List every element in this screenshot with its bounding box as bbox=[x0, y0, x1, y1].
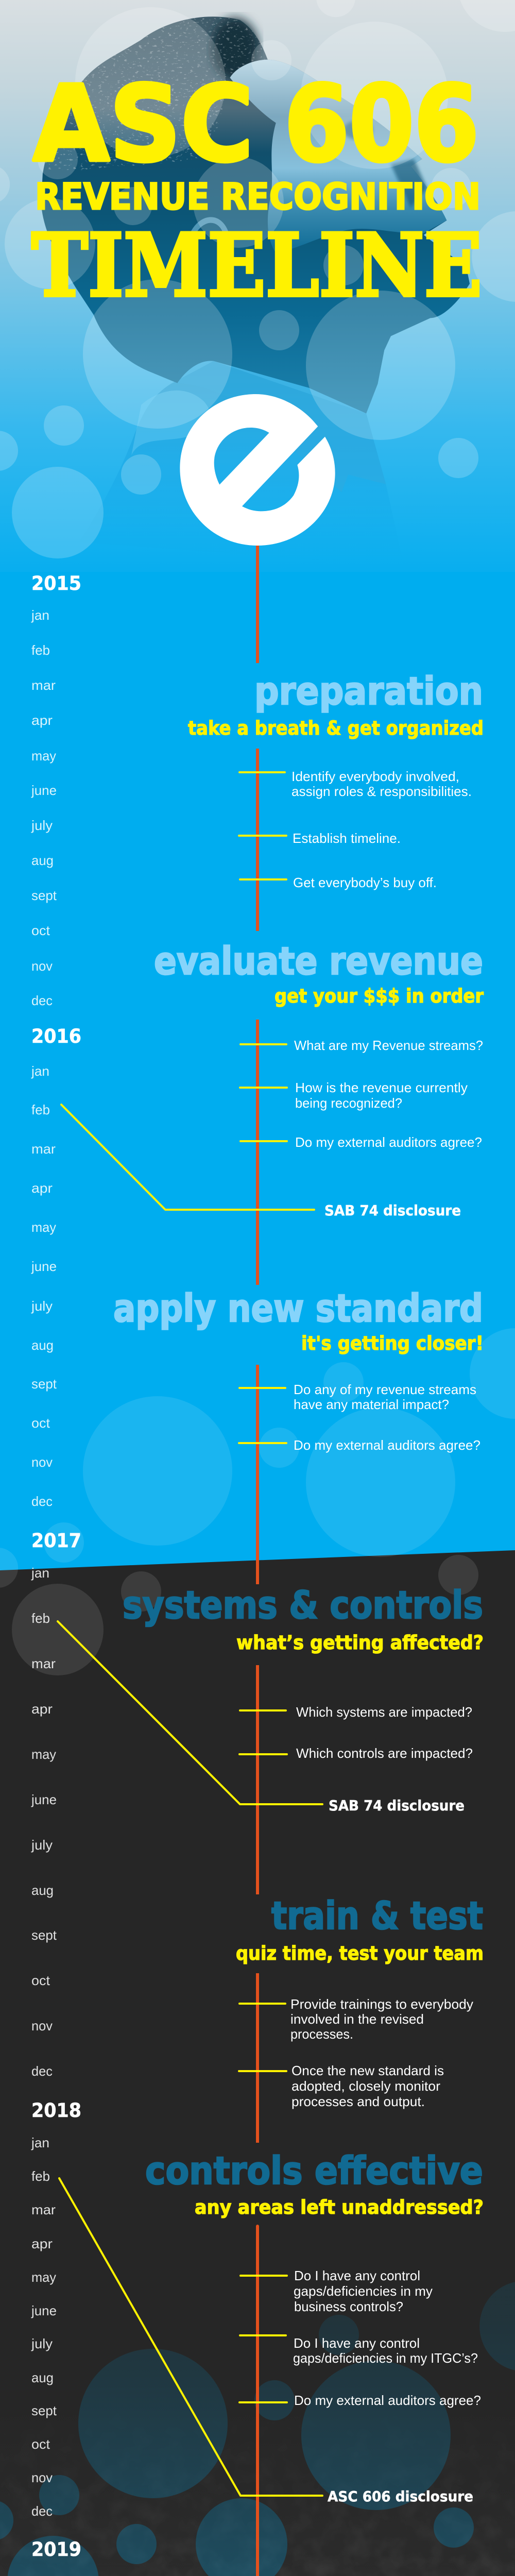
header bubbles bbox=[0, 0, 515, 558]
timeline segment bbox=[256, 749, 259, 931]
months: 2017: sept bbox=[31, 1927, 57, 1943]
months: 2018: 2018 bbox=[31, 2099, 81, 2122]
item: provide trainings: processes. bbox=[290, 2026, 353, 2042]
months: 2018: sept bbox=[31, 2403, 57, 2418]
face bbox=[230, 60, 447, 253]
callout: SAB 74 disclosure 2016 bbox=[61, 1105, 461, 1219]
months: 2018: may bbox=[31, 2269, 56, 2285]
item: revenue streams: What are my Revenue streams? bbox=[294, 1038, 483, 1053]
months: 2018: apr bbox=[31, 2236, 53, 2251]
item: identify everybody: Identify everybody involved, bbox=[291, 769, 459, 784]
item: revenue recognized bbox=[240, 1080, 468, 1111]
title: 606 bbox=[284, 63, 479, 185]
subheading: getting closer: it's getting closer! bbox=[301, 1332, 484, 1354]
item: buy off: Get everybody’s buy off. bbox=[293, 875, 437, 890]
middle bubbles bbox=[0, 1328, 515, 1675]
months: 2017: mar bbox=[31, 1656, 56, 1671]
item: material impact: Do any of my revenue streams bbox=[294, 1382, 476, 1397]
months: 2016: mar bbox=[31, 1141, 56, 1157]
item: business controls: business controls? bbox=[294, 2299, 403, 2314]
item: provide trainings bbox=[239, 1996, 473, 2042]
collar bbox=[174, 361, 386, 492]
months: 2015: june bbox=[31, 783, 57, 798]
subheading: areas unaddressed: any areas left unaddressed? bbox=[195, 2196, 484, 2218]
title: ASC bbox=[33, 63, 253, 185]
header sky background bbox=[0, 0, 515, 572]
months: 2018: july bbox=[31, 2336, 53, 2351]
item: auditors agree: Do my external auditors agree? bbox=[295, 1134, 482, 1150]
left collar highlight bbox=[131, 391, 211, 455]
months: 2017: oct bbox=[31, 1973, 50, 1988]
months: 2016: aug bbox=[31, 1337, 54, 1353]
months: 2015: mar bbox=[31, 677, 56, 693]
subheading: what is affected: what’s getting affected? bbox=[236, 1632, 484, 1654]
months: 2017: july bbox=[31, 1837, 53, 1853]
timeline segment bbox=[256, 1665, 259, 1894]
dark back of hair bbox=[211, 18, 259, 79]
main blue background bbox=[0, 572, 515, 1602]
months: 2018: aug bbox=[31, 2370, 54, 2385]
item: controls impacted: Which controls are impacted? bbox=[296, 1745, 473, 1761]
timeline segment bbox=[256, 1973, 259, 2143]
subheading: take a breath: take a breath & get organized bbox=[188, 717, 484, 739]
months: 2018 bbox=[31, 2099, 81, 2519]
months: 2015: nov bbox=[31, 958, 53, 974]
head silhouette bbox=[41, 16, 470, 414]
months: 2016: dec bbox=[31, 1494, 53, 1509]
months: 2015: apr bbox=[31, 713, 53, 728]
panel: preparation bbox=[188, 669, 484, 931]
months: 2018: oct bbox=[31, 2436, 50, 2452]
panel: evaluate revenue bbox=[61, 939, 484, 1285]
timeline segment: intro bbox=[256, 546, 259, 663]
months: 2018: nov bbox=[31, 2470, 53, 2485]
item: business controls bbox=[241, 2268, 433, 2314]
icon: embark logo mark bbox=[180, 394, 335, 546]
callout: SAB 74 disclosure 2017: SAB 74 disclosure bbox=[329, 1797, 465, 1814]
months: 2017: may bbox=[31, 1747, 56, 1762]
months: 2018: jan bbox=[31, 2135, 49, 2150]
months: 2016: nov bbox=[31, 1454, 53, 1470]
item: establish timeline: Establish timeline. bbox=[293, 831, 401, 846]
months: 2018: dec bbox=[31, 2503, 53, 2519]
months: 2017: jan bbox=[31, 1565, 49, 1581]
item: material impact: have any material impact? bbox=[294, 1397, 449, 1412]
months: 2016: 2016 bbox=[31, 1025, 81, 1047]
months: 2017: apr bbox=[31, 1701, 53, 1717]
subheading: get your money in order: get your $$$ in order bbox=[274, 985, 484, 1007]
item: systems impacted: Which systems are impacted? bbox=[296, 1704, 472, 1720]
item: auditors agree: Do my external auditors agree? bbox=[294, 1437, 480, 1453]
item: business controls: gaps/deficiencies in my bbox=[294, 2283, 433, 2299]
heading: controls effective: controls effective bbox=[145, 2149, 483, 2193]
timeline segment bbox=[256, 1365, 259, 1584]
panel: controls effective bbox=[59, 2149, 484, 2576]
months: 2017: feb bbox=[31, 1611, 50, 1626]
header photo: man looking up bbox=[42, 12, 470, 492]
title: REVENUE RECOGNITION bbox=[35, 176, 480, 218]
panel: apply new standard bbox=[113, 1286, 484, 1584]
callout: SAB 74 disclosure 2016: SAB 74 disclosure bbox=[324, 1202, 461, 1219]
months: 2015: dec bbox=[31, 993, 53, 1008]
item: identify everybody: assign roles & responsibilities. bbox=[291, 784, 472, 799]
callout: ASC 606 disclosure bbox=[59, 2178, 473, 2505]
months: 2018: feb bbox=[31, 2168, 50, 2184]
months: 2015: jan bbox=[31, 607, 49, 623]
months: 2015: 2015 bbox=[31, 572, 81, 595]
item: monitor processes: processes and output. bbox=[291, 2094, 425, 2109]
callout: SAB 74 disclosure 2017 bbox=[58, 1621, 465, 1814]
months: 2016: may bbox=[31, 1219, 56, 1235]
months: 2018: mar bbox=[31, 2202, 56, 2217]
title bbox=[31, 63, 482, 316]
months: 2017: aug bbox=[31, 1883, 54, 1898]
months: 2015 bbox=[31, 572, 81, 1008]
item: identify everybody bbox=[239, 769, 472, 799]
item: provide trainings: involved in the revised bbox=[290, 2011, 424, 2027]
months: 2017: dec bbox=[31, 2063, 53, 2079]
heading: train and test: train & test bbox=[271, 1894, 483, 1938]
timeline segment bbox=[256, 1020, 259, 1285]
eye shadow bbox=[344, 121, 373, 140]
callout: ASC 606 disclosure: ASC 606 disclosure bbox=[328, 2488, 473, 2505]
item: monitor processes bbox=[239, 2063, 444, 2109]
item: ITGCs: Do I have any control bbox=[294, 2335, 420, 2351]
months: 2018: june bbox=[31, 2303, 57, 2318]
item: ITGCs: gaps/deficiencies in my ITGC’s? bbox=[293, 2350, 478, 2366]
item: monitor processes: adopted, closely monitor bbox=[291, 2078, 440, 2094]
subheading: quiz time: quiz time, test your team bbox=[236, 1942, 484, 1964]
months: 2016: june bbox=[31, 1259, 57, 1274]
nostril and mouth shadow bbox=[391, 159, 427, 208]
months: 2015: may bbox=[31, 748, 56, 764]
months: 2015: july bbox=[31, 818, 53, 833]
dark lower background bbox=[0, 1550, 515, 2576]
shirt body bbox=[79, 361, 404, 567]
months: 2015: sept bbox=[31, 888, 57, 903]
timeline segment bbox=[256, 2225, 259, 2576]
months: 2017 bbox=[31, 1530, 81, 2079]
months: 2015: oct bbox=[31, 923, 50, 938]
months: 2016: sept bbox=[31, 1376, 57, 1392]
months: 2016: july bbox=[31, 1298, 53, 1314]
item: monitor processes: Once the new standard is bbox=[291, 2063, 444, 2078]
panel: train and test bbox=[236, 1894, 484, 2143]
months: 2017: nov bbox=[31, 2018, 53, 2033]
months: 2016: jan bbox=[31, 1063, 49, 1079]
item: revenue recognized: being recognized? bbox=[295, 1095, 402, 1111]
months: 2016 bbox=[31, 1025, 81, 1509]
item: auditors agree: Do my external auditors agree? bbox=[294, 2393, 481, 2408]
months: 2016: oct bbox=[31, 1415, 50, 1431]
months: 2017: 2017 bbox=[31, 1530, 81, 1552]
item: revenue recognized: How is the revenue currently bbox=[295, 1080, 468, 1095]
months: 2016: apr bbox=[31, 1180, 53, 1196]
item: business controls: Do I have any control bbox=[294, 2268, 420, 2283]
textured lower background bbox=[1, 2504, 515, 2576]
months: 2015: feb bbox=[31, 642, 50, 658]
months: 2016: feb bbox=[31, 1102, 50, 1117]
item: material impact bbox=[239, 1382, 476, 1412]
item: provide trainings: Provide trainings to everybody bbox=[290, 1996, 473, 2012]
lower bubbles bbox=[0, 2282, 515, 2576]
months: 2015: aug bbox=[31, 853, 54, 868]
months: 2017: june bbox=[31, 1792, 57, 1807]
year: 2019: 2019 bbox=[31, 2538, 81, 2561]
hair highlights bbox=[43, 11, 272, 170]
heading: preparation: preparation bbox=[254, 669, 483, 714]
panel: systems and controls bbox=[58, 1583, 484, 1894]
item: ITGCs bbox=[240, 2335, 478, 2366]
ear bbox=[192, 220, 228, 275]
